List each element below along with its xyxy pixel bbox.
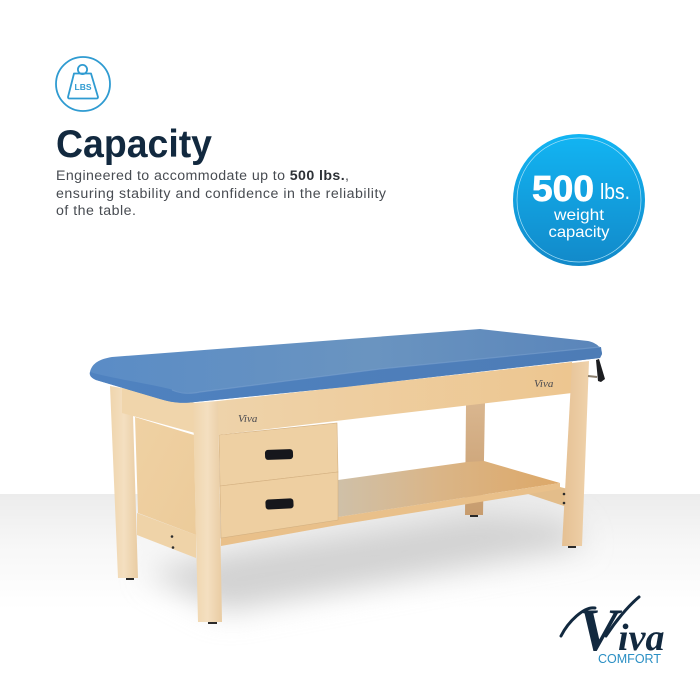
drawer handle top [265, 449, 293, 460]
side apron [122, 388, 195, 433]
description text: Engineered to accommodate up to 500 lbs., [56, 168, 349, 184]
badge: 500 lbs weight capacity: 500 [532, 168, 594, 209]
icon: weight in circle [56, 57, 110, 111]
floor shadow [145, 512, 585, 612]
rear right leg [465, 403, 485, 515]
headrest lever [588, 359, 605, 382]
brand logo: Viva Comfort: COMFORT [598, 652, 661, 666]
storage side panel [135, 417, 196, 535]
feet [126, 515, 576, 624]
description text: ensuring stability and confidence in the reliability [56, 186, 387, 202]
icon: weight in circle: LBS [74, 82, 92, 92]
apron logo left: Viva [238, 413, 258, 425]
front left leg [193, 401, 222, 622]
shelf [221, 461, 560, 546]
description text [56, 168, 387, 219]
floor backdrop [0, 494, 700, 610]
apron logo right: Viva [534, 378, 554, 390]
exam table [90, 329, 605, 624]
drawer handle bottom [265, 498, 294, 510]
badge: 500 lbs weight capacity: lbs. [600, 179, 630, 204]
front apron [218, 362, 572, 435]
badge: 500 lbs weight capacity [513, 134, 645, 266]
badge: 500 lbs weight capacity: capacity [548, 224, 610, 241]
lower side rail [137, 513, 196, 558]
drawers [219, 423, 338, 538]
description text: of the table. [56, 203, 136, 219]
front right leg [562, 361, 589, 546]
badge: 500 lbs weight capacity: weight [553, 207, 605, 224]
brand logo: Viva Comfort: Viva [578, 597, 664, 663]
rear left leg [110, 386, 138, 578]
blue padded top [90, 329, 602, 403]
right side rail [525, 487, 568, 507]
fasteners [171, 493, 565, 549]
title: Capacity [56, 123, 212, 166]
